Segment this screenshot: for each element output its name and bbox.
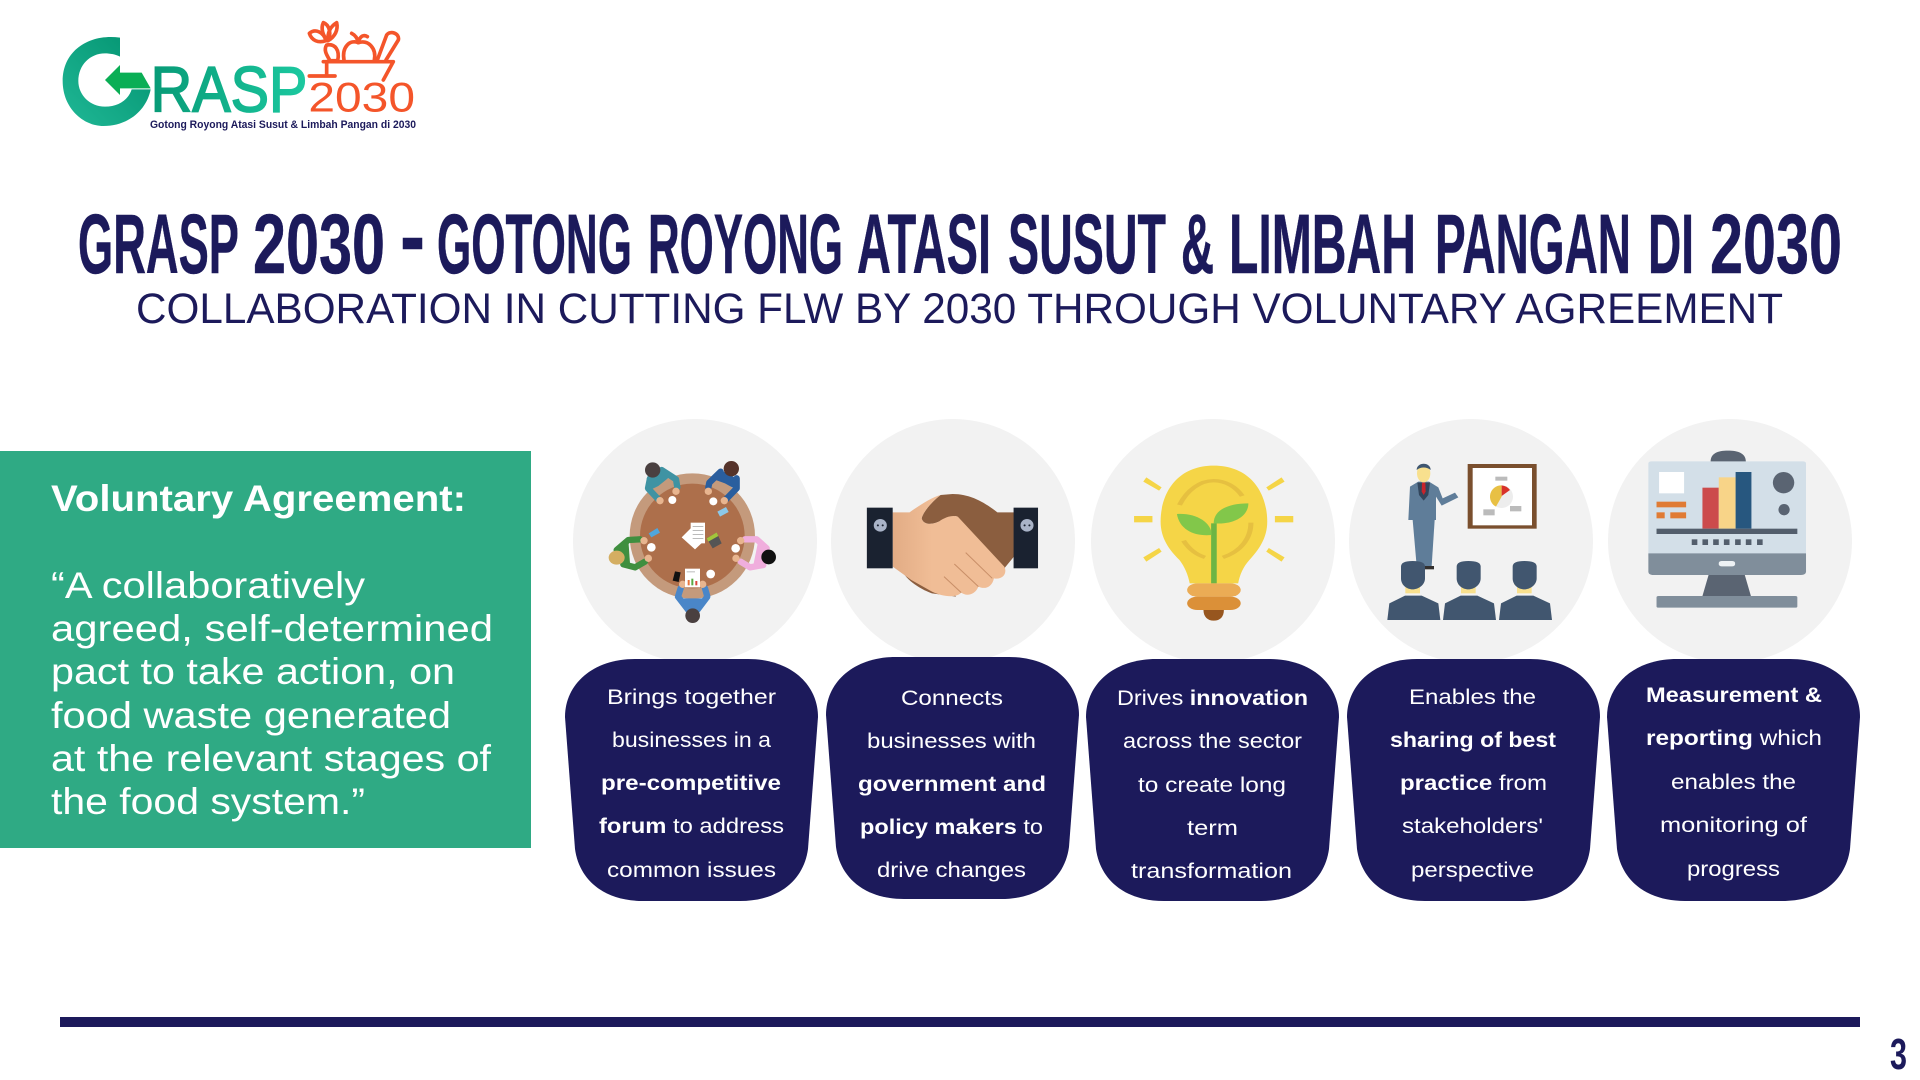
card: measurement and reporting: reporting which xyxy=(1646,726,1822,750)
card: pre-competitive forum: pre-competitive xyxy=(601,771,781,795)
title: & xyxy=(1181,197,1214,291)
card: innovation xyxy=(1086,659,1339,901)
card: innovation: across the sector xyxy=(1123,729,1302,753)
card: sharing of best practice xyxy=(1347,659,1600,901)
icon circle: monitor with bar chart xyxy=(1608,419,1852,663)
card: government and policy makers: policy makers to xyxy=(860,815,1043,839)
title: SUSUT xyxy=(1008,197,1166,291)
panel quote: food waste generated xyxy=(51,695,451,736)
card: innovation: term xyxy=(1187,816,1238,840)
icon circle: round table xyxy=(573,419,817,663)
title: DI xyxy=(1648,197,1694,291)
logo: GRASP 2030: Gotong Royong Atasi Susut & Limbah Pangan di 2030 xyxy=(150,119,416,131)
card: sharing of best practice: Enables the xyxy=(1409,685,1536,709)
panel: voluntary agreement definition xyxy=(0,451,531,848)
card: sharing of best practice: practice from xyxy=(1400,771,1547,795)
card: sharing of best practice: sharing of best xyxy=(1390,728,1556,752)
card: pre-competitive forum: businesses in a xyxy=(612,728,771,752)
card: pre-competitive forum: forum to address xyxy=(599,814,784,838)
card: government and policy makers xyxy=(826,657,1079,899)
icon circle: presentation to audience xyxy=(1349,419,1593,663)
panel quote: “A collaboratively xyxy=(51,565,366,606)
icon circle: light bulb with sprout xyxy=(1091,419,1335,663)
title: GOTONG xyxy=(437,197,632,291)
logo: GRASP 2030: RASP xyxy=(151,54,307,126)
page number: 3 xyxy=(1890,1030,1907,1079)
card: pre-competitive forum xyxy=(565,659,818,901)
card: measurement and reporting: Measurement & xyxy=(1646,683,1822,707)
title: ROYONG xyxy=(648,197,843,291)
panel quote: at the relevant stages of xyxy=(51,738,492,779)
logo: GRASP 2030 xyxy=(63,23,416,131)
card: government and policy makers: drive changes xyxy=(877,858,1026,882)
icon circle: handshake xyxy=(831,419,1075,663)
card: measurement and reporting: enables the xyxy=(1671,770,1796,794)
panel heading: Voluntary Agreement: xyxy=(51,478,466,519)
title: ATASI xyxy=(857,197,991,291)
title: GRASP xyxy=(78,197,239,291)
card: innovation: Drives innovation xyxy=(1117,686,1308,710)
card: sharing of best practice: perspective xyxy=(1411,858,1534,882)
card: measurement and reporting: progress xyxy=(1687,857,1780,881)
subtitle: COLLABORATION IN CUTTING FLW BY 2030 THROUGH VOLUNTARY AGREEMENT xyxy=(136,285,1783,333)
title: 2030 xyxy=(253,197,385,291)
card: innovation: transformation xyxy=(1131,859,1292,883)
card: measurement and reporting: monitoring of xyxy=(1660,813,1807,837)
logo: GRASP 2030: 2030 xyxy=(308,75,415,121)
panel quote: pact to take action, on xyxy=(51,651,455,692)
card: government and policy makers: businesses with xyxy=(867,729,1036,753)
panel quote xyxy=(51,565,493,822)
title: LIMBAH xyxy=(1229,197,1416,291)
card: sharing of best practice: stakeholders' xyxy=(1402,814,1543,838)
card: government and policy makers: Connects xyxy=(901,686,1003,710)
card: pre-competitive forum: Brings together xyxy=(607,685,776,709)
title xyxy=(78,197,1842,291)
card: government and policy makers: government and xyxy=(858,772,1046,796)
card: pre-competitive forum: common issues xyxy=(607,858,776,882)
title: PANGAN xyxy=(1435,197,1631,291)
card: measurement and reporting xyxy=(1607,659,1860,901)
panel quote: agreed, self-determined xyxy=(51,608,493,649)
title: 2030 xyxy=(1710,197,1842,291)
card: innovation: to create long xyxy=(1138,773,1286,797)
panel quote: the food system.” xyxy=(51,781,365,822)
